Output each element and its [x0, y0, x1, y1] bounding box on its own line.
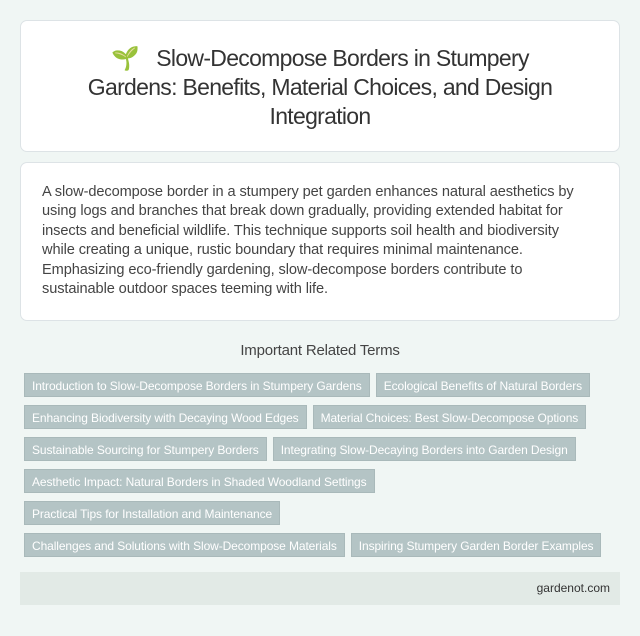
- title panel: 🌱 Slow-Decompose Borders in Stumpery: [111, 45, 529, 71]
- panel: description: while creating a unique, rustic boundary that requires minimal maintenance.: [42, 242, 523, 258]
- tag list: Enhancing Biodiversity with Decaying Wood Edges: [32, 411, 299, 425]
- tag list: [24, 373, 601, 557]
- tag list: Challenges and Solutions with Slow-Decompose Materials: [32, 539, 337, 553]
- tag list: Introduction to Slow-Decompose Borders in Stumpery Gardens: [32, 379, 362, 393]
- tag list: Aesthetic Impact: Natural Borders in Shaded Woodland Settings: [32, 475, 367, 489]
- panel: description: insects and beneficial wildlife. This technique supports soil health and biodiversity: [42, 223, 559, 239]
- panel: description: using logs and branches that break down gradually, providing extended habitat for: [42, 203, 563, 219]
- tag list: Ecological Benefits of Natural Borders: [384, 379, 582, 393]
- footer: [20, 572, 620, 605]
- title panel: [20, 20, 620, 152]
- tag list: Integrating Slow-Decaying Borders into Garden Design: [281, 443, 568, 457]
- tag list: Inspiring Stumpery Garden Border Examples: [359, 539, 593, 553]
- footer: gardenot.com: [537, 581, 610, 595]
- title panel: Integration: [270, 103, 370, 129]
- tag list: Sustainable Sourcing for Stumpery Borders: [32, 443, 259, 457]
- title panel: Gardens: Benefits, Material Choices, and Design: [88, 74, 552, 100]
- panel: description: Emphasizing eco-friendly gardening, slow-decompose borders contribute to: [42, 262, 522, 278]
- tag list: Practical Tips for Installation and Maintenance: [32, 507, 272, 521]
- panel: description: A slow-decompose border in a stumpery pet garden enhances natural aesthetics by: [42, 184, 574, 200]
- tag list: Material Choices: Best Slow-Decompose Options: [321, 411, 578, 425]
- panel: description: sustainable outdoor spaces teeming with life.: [42, 281, 328, 297]
- heading: related terms: Important Related Terms: [240, 342, 400, 359]
- panel: description: [20, 162, 620, 321]
